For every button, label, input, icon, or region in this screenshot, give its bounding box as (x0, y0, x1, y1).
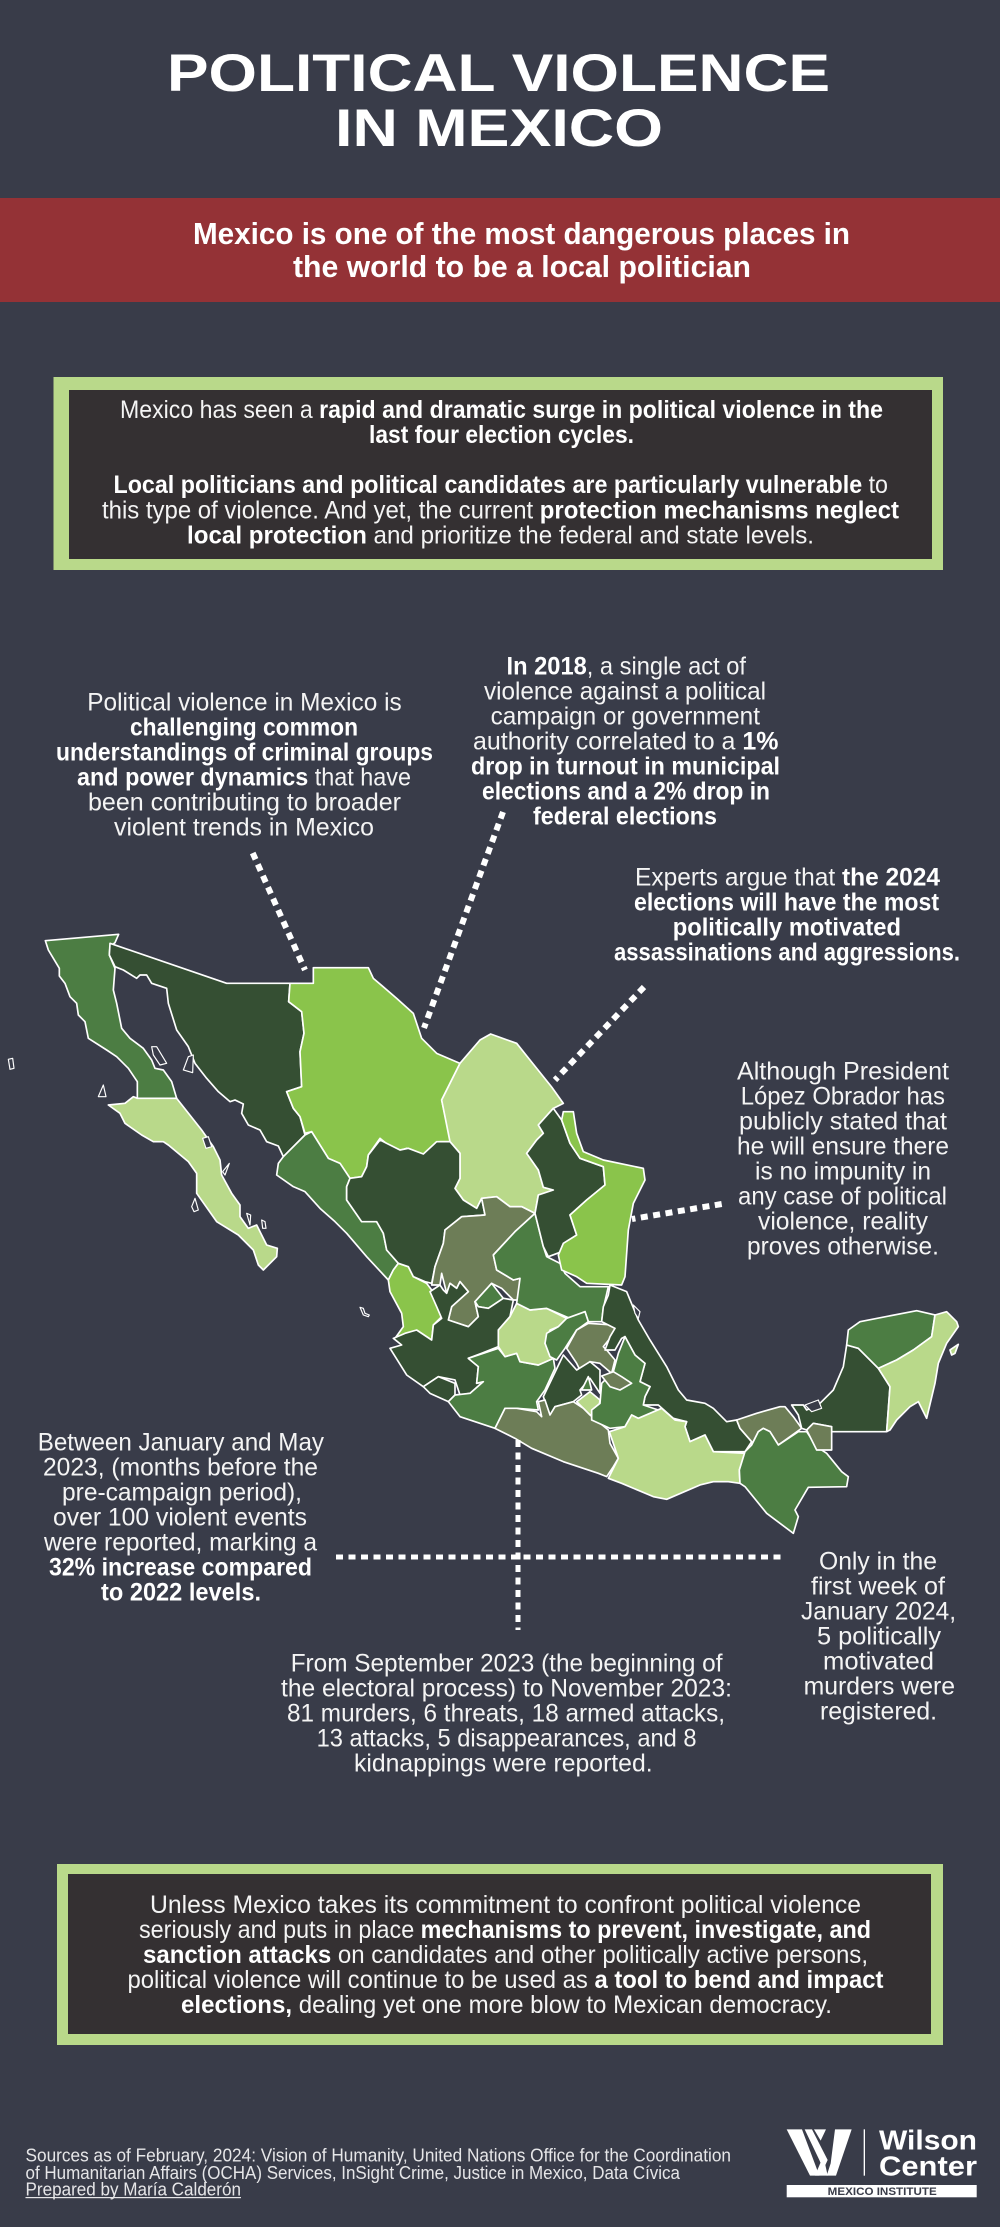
callout: electoral process counts: the electoral process) to November 2023: (281, 1675, 732, 1703)
callout: 32% increase: pre-campaign period), (62, 1479, 302, 1507)
panel: intro box: Local politicians and political candidates are particularly vulnerable to (114, 471, 888, 499)
banner: subtitle: Mexico is one of the most dangerous places in (193, 216, 850, 251)
callout: common understandings: violent trends in Mexico (114, 814, 374, 842)
title (167, 44, 830, 158)
panel: conclusion box: elections, dealing yet one more blow to Mexican democracy. (181, 1991, 832, 2019)
callout: electoral process counts (281, 1650, 732, 1778)
callout: 2024 elections: assassinations and aggressions. (614, 939, 960, 967)
icon: W mark (787, 2129, 865, 2176)
callout: 2018 turnout (471, 652, 780, 830)
callout: electoral process counts: 81 murders, 6 threats, 18 armed attacks, (287, 1700, 725, 1728)
callout: 2018 turnout: campaign or government (491, 702, 760, 730)
callout: common understandings (56, 689, 433, 842)
callout: common understandings: and power dynamics that have (77, 764, 411, 792)
callout: 32% increase: 32% increase compared (49, 1554, 312, 1582)
callout: 2024 elections: Experts argue that the 2024 (635, 864, 940, 892)
callout: common understandings: understandings of criminal groups (56, 739, 433, 767)
callout: 2018 turnout: authority correlated to a 1% (473, 727, 778, 755)
callout: first week of January: Only in the (819, 1547, 937, 1575)
callout: first week of January: January 2024, (801, 1597, 956, 1625)
callout: 2018 turnout: federal elections (533, 802, 717, 830)
callout: impunity: violence, reality (758, 1207, 928, 1235)
callout: 32% increase: 2023, (months before the (43, 1454, 318, 1482)
panel: conclusion box: seriously and puts in place mechanisms to prevent, investigate, and (139, 1916, 871, 1944)
sources text: of Humanitarian Affairs (OCHA) Services, InSight Crime, Justice in Mexico, Data Cívica (26, 2163, 681, 2183)
logo: Wilson Center Mexico Institute: Wilson (879, 2124, 977, 2155)
callout: impunity: any case of political (738, 1182, 947, 1210)
panel: intro box: Mexico has seen a rapid and dramatic surge in political violence in the (120, 396, 883, 424)
panel: intro box: local protection and prioritize the federal and state levels. (187, 522, 814, 550)
callout: impunity: proves otherwise. (747, 1232, 939, 1260)
callout: first week of January: first week of (811, 1572, 945, 1600)
sources text: Sources as of February, 2024: Vision of Humanity, United Nations Office for the Coordination (26, 2146, 731, 2166)
title: IN MEXICO (335, 99, 663, 158)
callout: first week of January: murders were (804, 1672, 955, 1700)
callout: first week of January (801, 1547, 956, 1725)
panel: intro box (54, 377, 943, 570)
map of Mexico by state (8, 934, 958, 1533)
callout: impunity: is no impunity in (755, 1157, 931, 1185)
callout: electoral process counts: kidnappings were reported. (354, 1750, 653, 1778)
panel: intro box: this type of violence. And yet, the current protection mechanisms neglect (102, 496, 900, 524)
logo: Wilson Center Mexico Institute (787, 2124, 977, 2198)
panel: conclusion box: Unless Mexico takes its commitment to confront political violence (150, 1891, 861, 1919)
callout: 32% increase: were reported, marking a (43, 1529, 317, 1557)
arrow: callout 3 leader (555, 987, 644, 1080)
callout: 32% increase: to 2022 levels. (101, 1579, 261, 1607)
logo: Wilson Center Mexico Institute: MEXICO INSTITUTE (828, 2186, 937, 2198)
panel: conclusion box: political violence will continue to be used as a tool to bend and impact (128, 1966, 884, 1994)
callout: 2018 turnout: elections and a 2% drop in (482, 777, 770, 805)
panel: conclusion box (57, 1864, 943, 2045)
callout: electoral process counts: From September 2023 (the beginning of (291, 1650, 723, 1678)
callout: common understandings: Political violence in Mexico is (87, 689, 402, 717)
callout: impunity: he will ensure there (737, 1132, 949, 1160)
callout: impunity: publicly stated that (739, 1107, 947, 1135)
arrow: callout 2 leader (424, 812, 503, 1028)
arrow: callout 6 leader (516, 1440, 520, 1630)
arrow: callout 4 leader (632, 1204, 722, 1219)
callout: 32% increase: Between January and May (38, 1429, 324, 1457)
title: POLITICAL VIOLENCE (167, 44, 830, 103)
callout: 32% increase: over 100 violent events (53, 1504, 307, 1532)
banner: subtitle: the world to be a local politician (293, 249, 751, 284)
callout: 2018 turnout: violence against a political (484, 677, 766, 705)
panel: conclusion box: sanction attacks on candidates and other politically active persons, (143, 1941, 868, 1969)
sources text: Prepared by María Calderón (26, 2180, 241, 2200)
callout: 2024 elections: politically motivated (673, 914, 901, 942)
callout: common understandings: challenging common (130, 714, 358, 742)
arrow: callout 5 and 7 leader (336, 1554, 785, 1560)
callout: 2018 turnout: drop in turnout in municipal (471, 752, 780, 780)
banner: subtitle (0, 198, 1000, 302)
logo: Wilson Center Mexico Institute: Center (879, 2151, 977, 2182)
arrow: callout 1 leader (253, 853, 305, 970)
panel: intro box: last four election cycles. (369, 421, 634, 449)
callout: impunity (737, 1057, 949, 1260)
callout: impunity: Although President (737, 1057, 949, 1085)
sources text (26, 2146, 731, 2200)
callout: first week of January: 5 politically (817, 1622, 942, 1650)
callout: 2024 elections: elections will have the most (634, 889, 940, 917)
callout: electoral process counts: 13 attacks, 5 disappearances, and 8 (317, 1725, 696, 1753)
callout: 2018 turnout: In 2018, a single act of (506, 652, 746, 680)
callout: impunity: López Obrador has (741, 1082, 945, 1110)
callout: 2024 elections (614, 864, 960, 967)
callout: first week of January: registered. (820, 1697, 937, 1725)
callout: 32% increase (38, 1429, 324, 1607)
callout: first week of January: motivated (823, 1647, 934, 1675)
callout: common understandings: been contributing to broader (88, 789, 401, 817)
